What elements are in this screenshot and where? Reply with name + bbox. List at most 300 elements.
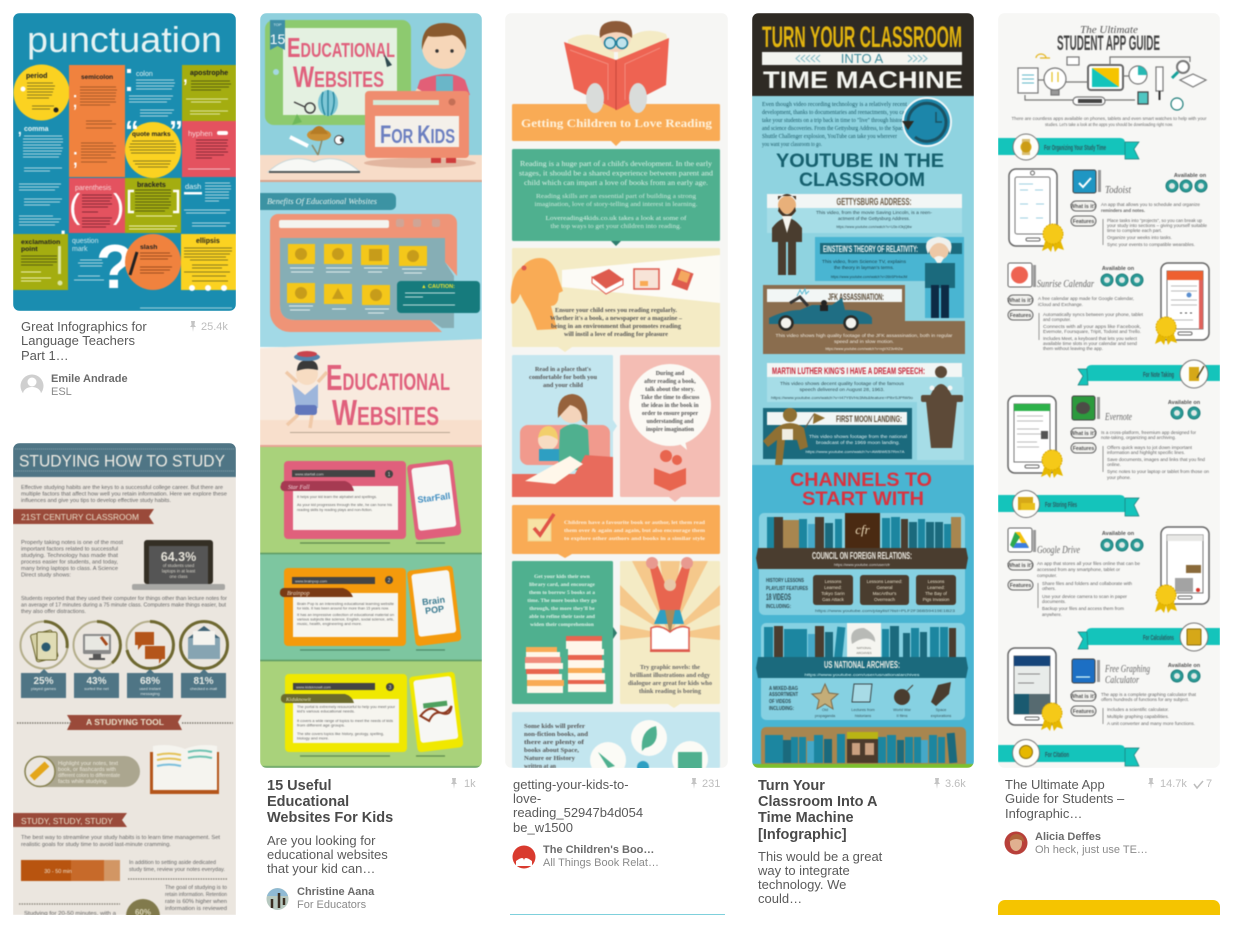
figure: astronaut <box>763 408 825 467</box>
entry: JFK Assassination <box>763 285 965 354</box>
panel: favourite author: them over & again and again, but also encourage them <box>564 528 705 534</box>
tile: slash: slash <box>140 244 157 251</box>
entry: JFK Assassination: https://www.youtube.com/watch?v=ngVXZ3v4h2w <box>825 347 903 351</box>
image: National Archives: NATIONAL <box>857 646 872 650</box>
app: Free Graphing Calculator: Calculator <box>1105 675 1139 686</box>
pin: studying how to study: study time, review your notes everyday. <box>129 867 225 873</box>
title: The Ultimate <box>1080 24 1138 36</box>
app: Sunrise Calendar: them without leaving the app. <box>1043 346 1103 351</box>
app: Evernote: your phone. <box>1107 475 1131 480</box>
panel: non-fiction: non-fiction books, and <box>524 732 589 738</box>
laptop stat: of students used <box>163 563 195 568</box>
banner: benefits <box>260 193 396 210</box>
illustration: superhero on book <box>646 557 693 651</box>
panel: library card: library card, and encourage <box>529 582 595 588</box>
laptop stat: one class <box>169 574 188 579</box>
next pin: yellow top edge <box>998 900 1220 915</box>
shelf: US National Archives: World War <box>893 708 912 712</box>
card: Brainpop: various subjects like science, English, social science, arts, <box>297 618 394 622</box>
pin: studying how to study: The goal of studying is to <box>165 885 227 891</box>
caption: punctuation pin: Great Infographics for <box>21 319 147 334</box>
caption: app guide pin: Oh heck, just use TE… <box>1035 844 1148 856</box>
phone: Evernote <box>1008 396 1063 478</box>
tile: quote marks <box>125 115 183 178</box>
caption: app guide pin: Guide for Students – <box>1005 791 1125 806</box>
entry: Martin Luther King: This video shows decent quality footage of the famous <box>780 381 904 386</box>
heading: youtube in the classroom: CLASSROOM <box>799 170 925 191</box>
panel: introduction: Reading skills are an essential part of building a strong <box>536 193 696 200</box>
panel: non-fiction: written at an <box>524 764 557 770</box>
tile: hyphen <box>182 121 236 177</box>
heading: channels to start with: START WITH <box>802 489 924 510</box>
app: Google Drive: computer. <box>1037 573 1057 578</box>
entry: Martin Luther King: MARTIN LUTHER KING'S I HAVE A DREAM SPEECH: <box>772 366 925 377</box>
tile: ellipsis <box>181 234 236 291</box>
tile: parenthesis: ) <box>113 188 124 226</box>
app: Google Drive: Google Drive <box>1037 545 1080 556</box>
ribbon: a studying tool <box>17 715 233 730</box>
intro text: There are countless apps available on phones, tablets and even smart watches to help with your <box>1012 116 1207 121</box>
caption: time machine pin: Time Machine <box>758 810 854 826</box>
caption: punctuation pin: ESL <box>51 386 72 398</box>
panel: comfortable place: comfortable for both you <box>529 375 598 381</box>
panel: graphic novels: Try graphic novels: the <box>640 665 700 671</box>
phone: Todoist <box>1009 169 1064 252</box>
panel: introduction: Reading is a huge part of a child's development. In the early <box>520 160 713 168</box>
panel: talk about the story: understanding and <box>647 419 694 425</box>
card: Kids: kid's various educational needs. <box>297 710 355 714</box>
ribbon: study study study <box>13 813 127 827</box>
shelf: US National Archives <box>756 623 968 720</box>
entry: Gettysburg Address: GETTYSBURG ADDRESS: <box>836 197 912 208</box>
app: Google Drive: anywhere. <box>1042 612 1062 617</box>
panel: talk about the story: During and <box>656 371 685 377</box>
app: Sunrise Calendar: Available on <box>1102 266 1135 272</box>
panel: see you reading: Ensure your child sees you reading regularly. <box>555 308 678 314</box>
pin: studying how to study: In addition to setting aside dedicated <box>129 860 216 866</box>
app: Sunrise Calendar: Sunrise Calendar <box>1037 279 1094 290</box>
stat: 43% surfed the net: surfed the net <box>84 686 110 691</box>
banner: for citation: For Citation <box>1045 752 1069 759</box>
entry: Einstein's Theory of Relativity: https://www.youtube.com/watch?v=26bSPIr4wJM <box>831 275 907 279</box>
caption: time machine pin <box>757 778 966 906</box>
header: TURN YOUR CLASSROOM <box>762 21 962 54</box>
caption: educational websites pin: For Educators <box>297 899 367 911</box>
card: Brainpop: for kids. It has been around for more than 15 years now. <box>297 606 389 610</box>
illustration: running kid <box>286 351 327 428</box>
app: Sunrise Calendar: Evernote, Foursquare, TripIt, Todoist and Trello. <box>1043 329 1141 334</box>
browser: for kids <box>365 91 469 158</box>
illustration: open book, balloon, hat <box>268 90 360 173</box>
shelf: Council on Foreign Relations <box>756 513 968 615</box>
stat: 81% checked e-mail: 81% <box>193 676 214 687</box>
entry: Gettysburg Address: actment of the Gettysburg Address. <box>838 216 910 221</box>
app: Sunrise Calendar: Connects with all your apps like Facebook, <box>1043 324 1141 329</box>
pin: studying how to study: Properly taking notes is one of the most <box>21 540 123 546</box>
shelf: Council on Foreign Relations: Tokyo Sarin <box>821 591 845 596</box>
entry: Martin Luther King <box>767 363 964 460</box>
icon: clock <box>902 98 951 146</box>
banner: for organizing your study time: For Organizing Your Study Time <box>1044 145 1106 152</box>
panel: library card: widen their comprehension <box>530 622 594 628</box>
shelf: US National Archives: https://www.youtube.com/user/usnationalarchives <box>804 673 920 677</box>
app: Google Drive: Share files and folders and collaborate with <box>1042 581 1133 586</box>
ribbon: a studying tool: A STUDYING TOOL <box>86 717 164 727</box>
stat: 81% checked e-mail <box>180 622 228 698</box>
caption: punctuation pin: Language Teachers <box>21 333 135 348</box>
panel: introduction: the top ways to get your children into reading. <box>550 224 682 230</box>
panel: library card: able to refine their taste and <box>529 614 595 620</box>
panel: introduction <box>512 149 720 246</box>
caption: punctuation pin: 25.4k <box>201 321 228 333</box>
pin: studying how to study: realistic goals for study time to avoid last-minute cramming. <box>21 842 171 848</box>
tile: quote marks: ” <box>169 115 183 146</box>
app: Todoist: time to complete each part. <box>1107 228 1162 233</box>
shelf: US National Archives: Old <box>822 708 828 712</box>
shelf: Council on Foreign Relations: Lessons Learned: <box>867 579 902 584</box>
app: Sunrise Calendar: available time slots in your calendar and send <box>1043 341 1138 346</box>
app: Free Graphing Calculator: offers hundreds of functions for any subject. <box>1101 697 1189 702</box>
panel: library card: through, the more they'll be <box>529 606 595 612</box>
image: National Archives <box>847 623 881 657</box>
shelf: Council on Foreign Relations: https://www.youtube.com/playlist?list=PLF2F36B59419E1B23 <box>815 609 955 613</box>
title <box>1057 24 1160 55</box>
panel: see you reading: will instil a love of reading for pleasure <box>564 332 668 338</box>
entry: Einstein's Theory of Relativity: This video, from Science TV, explains <box>822 259 906 264</box>
panel: library card: them to borrow 5 books at a <box>529 590 595 596</box>
entry: Gettysburg Address <box>767 194 962 275</box>
tile: colon: colon <box>136 71 153 78</box>
caption: educational websites pin: 15 Useful <box>267 778 331 794</box>
app: Todoist: Todoist <box>1105 185 1131 196</box>
illustration: car <box>769 289 872 330</box>
tile: slash <box>125 234 181 290</box>
app: Sunrise Calendar: Automatically syncs between your phone, tablet <box>1043 312 1144 317</box>
banner: for storing files: For Storing Files <box>1045 502 1077 509</box>
pin: studying how to study: process easier for students, and today, <box>21 560 118 566</box>
heading: channels to start with <box>790 470 932 510</box>
app: Free Graphing Calculator: Includes a scientific calculator. <box>1107 707 1169 712</box>
pin: studying how to study: retain information. Retention <box>165 892 227 898</box>
app: Google Drive: Available on <box>1102 531 1135 537</box>
banner: for calculations <box>1078 623 1220 651</box>
ribbon: study study study: STUDY, STUDY, STUDY <box>21 816 113 826</box>
heading: educational websites <box>290 357 450 433</box>
caption: educational websites pin: Websites For Kids <box>267 810 393 826</box>
stat: 25% played games: played games <box>31 686 56 691</box>
icons: star, scroll, bomb, rocket <box>812 682 951 709</box>
shelf: Council on Foreign Relations: HISTORY LESSONS <box>766 578 804 584</box>
header: INTO A <box>841 51 884 66</box>
app: Todoist: reminders and notes. <box>1101 208 1145 213</box>
tip pill: highlight: different colors to differentiate <box>58 773 120 779</box>
tablet with title: TOP <box>273 22 282 27</box>
tile: semicolon: ; <box>72 87 78 112</box>
panel: favourite author <box>512 505 720 558</box>
tile: dash: dash <box>185 182 201 191</box>
app: Todoist: What is it? <box>1070 204 1097 210</box>
entry: Einstein's Theory of Relativity <box>815 237 964 318</box>
entry: JFK Assassination: speed and in slow motion. <box>834 339 894 344</box>
tile: period: period <box>26 73 47 80</box>
app: Todoist: Sync your events to compatible wearables. <box>1107 242 1195 247</box>
card: Star Fall: 1 <box>388 472 391 478</box>
app: Evernote: What is it? <box>1070 431 1097 437</box>
tablet: StarFall: StarFall <box>417 491 451 505</box>
shelf: Council on Foreign Relations: cfr <box>855 522 871 537</box>
tile: semicolon: ; <box>72 144 79 171</box>
illustration: mother and child <box>512 394 613 497</box>
panel: see you reading: being in an environment that promotes reading <box>551 324 681 330</box>
phone: Google Drive <box>1155 527 1209 613</box>
panel: talk about the story: order to ensure proper <box>642 411 699 417</box>
caption: time machine pin: could… <box>758 891 802 906</box>
app: Todoist: your study into sections – giving yourself suitable <box>1107 223 1208 228</box>
heading: channels to start with: CHANNELS TO <box>790 470 932 491</box>
caption: reading pin: reading_52947b4d054 <box>513 805 643 820</box>
heading: educational websites: WEBSITES <box>332 392 439 433</box>
app: Google Drive: What is it? <box>1007 563 1034 569</box>
app: Todoist <box>1070 170 1208 247</box>
header <box>752 13 974 96</box>
browser: for kids: FOR KIDS <box>380 121 455 149</box>
caption: app guide pin: Infographic… <box>1005 806 1082 821</box>
app: Evernote: information and highlight specific lines. <box>1107 450 1185 455</box>
icons: book, newspaper, magazine <box>592 268 694 294</box>
stat: 25% played games: 25% <box>33 676 54 687</box>
caption: time machine pin: [Infographic] <box>758 827 847 843</box>
illustration: boy <box>414 23 470 163</box>
tile: apostrophe: apostrophe <box>190 70 228 77</box>
pin: studying how to study: important factors related to successful <box>21 546 118 552</box>
tile: exclamation point: exclamation <box>21 239 60 246</box>
app: Sunrise Calendar: Features <box>1010 313 1031 319</box>
app: Todoist: Place tasks into "projects", so you can break up <box>1107 218 1203 223</box>
pin: studying how to study <box>13 443 236 933</box>
stat circle: 60%: 60% <box>135 908 151 917</box>
caption: reading pin: love- <box>513 791 541 806</box>
entry: Gettysburg Address: https://www.youtube.com/watch?v=U3e-lOkjQ8w <box>836 225 912 229</box>
shelf: Council on Foreign Relations: Lessons <box>825 579 842 584</box>
banner: for note taking: For Note Taking <box>1143 372 1174 379</box>
panel: comfortable place: Read in a place that's <box>535 367 592 373</box>
panel: non-fiction: Nature or History <box>524 756 575 762</box>
panel: library card: Get your kids their own <box>534 574 590 580</box>
shelf: US National Archives: II films <box>897 714 908 718</box>
card: Star Fall: As your kid progresses through the site, he can hone his <box>297 503 392 507</box>
entry: Martin Luther King: speech delivered on August 28, 1963. <box>800 387 884 392</box>
shelf: US National Archives: INCLUDING: <box>769 706 794 712</box>
laptop stat <box>132 540 225 590</box>
app: Google Drive: accessed from any smartphone, tablet or <box>1037 567 1121 572</box>
shelf: US National Archives: Space <box>936 708 946 712</box>
caption: reading pin: The Children's Boo… <box>543 844 654 856</box>
app: Sunrise Calendar: Includes Meet, a keyboard that lets you select <box>1043 336 1138 341</box>
bar: study time <box>21 860 120 881</box>
tile: hyphen: hyphen <box>188 129 213 138</box>
pin: studying how to study: studying. Technology has made that <box>21 553 119 559</box>
caption: educational websites pin <box>266 778 476 911</box>
app: Google Drive: documents. <box>1042 599 1066 604</box>
tile: apostrophe <box>182 61 236 121</box>
avatar: Christine Aana <box>266 888 288 910</box>
poster title: punctuation <box>27 19 222 60</box>
app: Evernote <box>1070 396 1210 480</box>
app: Free Graphing Calculator: The app is a complete graphing calculator that <box>1101 692 1197 697</box>
panel: talk about the story: the ideas in the book in <box>641 403 699 409</box>
card: Brainpop: www.brainpop.com <box>295 580 327 584</box>
pin: ultimate student app guide <box>998 13 1220 768</box>
tablet: Brain Pop <box>407 565 462 646</box>
shelf: Council on Foreign Relations: INCLUDING: <box>766 604 791 610</box>
card: Brainpop: music, health, engineering and more. <box>297 622 362 626</box>
app: Free Graphing Calculator: Free Graphing <box>1104 664 1150 675</box>
intro paragraph: and science discoveries. From the Gettysburg Address, to the Space <box>762 126 905 132</box>
tablet: map <box>409 671 464 753</box>
tile: quote marks: “ <box>125 115 139 146</box>
panel: library card: time. The more books they go <box>527 598 597 604</box>
card: Kids: www.kidsknowit.com <box>296 686 331 690</box>
panel: see you reading: Whether it's a book, a newspaper or a magazine – <box>550 316 682 322</box>
intro paragraph: development, thanks to documentaries and reenactments, you can <box>762 110 907 116</box>
shelf: Council on Foreign Relations: Overreach <box>874 597 895 602</box>
tile: comma: , <box>60 214 66 239</box>
panel: library card <box>512 561 617 704</box>
caption: educational websites pin: Are you looking for <box>267 833 376 848</box>
shelf: Council on Foreign Relations: General <box>876 585 893 590</box>
app: Free Graphing Calculator: Multiple graphing capabilities. <box>1107 714 1169 719</box>
panel: graphic novels: dialogue are great for kids who <box>628 681 712 687</box>
tile: brackets: brackets <box>137 182 166 189</box>
tile: semicolon: semicolon <box>81 74 113 81</box>
tip pill: highlight: facts while studying. <box>58 779 108 785</box>
card: Kids: The site covers topics like history, geology, spelling, <box>297 732 384 736</box>
app: Sunrise Calendar: A free calendar app made for Google Calendar, <box>1038 296 1134 301</box>
banner: for citation <box>998 740 1139 766</box>
pin: studying how to study: The best way to streamline your study habits is to learn time management. Set <box>21 835 220 841</box>
app: Evernote: Available on <box>1168 400 1201 406</box>
tile: parenthesis <box>69 178 125 233</box>
app: Google Drive: Features <box>1010 583 1031 589</box>
app: Evernote: Offers quick ways to jot down important <box>1107 445 1193 450</box>
entry: Gettysburg Address: This video, from the movie Saving Lincoln, is a reen- <box>816 210 933 215</box>
intro paragraph: Even though video recording technology is a relatively recent <box>762 102 907 108</box>
panel: talk about the story: after reading a book, <box>644 379 696 385</box>
banner: for organizing your study time <box>998 134 1139 160</box>
laptop stat: 64.3% <box>161 550 196 564</box>
app: Todoist: Available on <box>1174 173 1207 179</box>
tile: period <box>14 64 70 120</box>
intro text: studies. Let's take a look at the apps you should be downloading right now. <box>1045 122 1173 127</box>
tablet with title: WEBSITES <box>293 61 384 94</box>
bar: study time: 30 - 50 min <box>44 869 72 875</box>
tile: colon <box>127 69 175 116</box>
banner: for storing files <box>998 490 1139 518</box>
banner: title <box>512 104 720 146</box>
tablet with title: 15 <box>270 31 285 47</box>
app: Google Drive: others. <box>1042 586 1056 591</box>
tablet: StarFall <box>407 459 462 540</box>
stat: 68% used instant messaging: used instant <box>139 686 162 691</box>
stat circle: 60% <box>125 898 161 915</box>
app: Sunrise Calendar: iCloud and Exchange. <box>1038 302 1083 307</box>
pin: studying how to study: Effective studying habits are the keys to a successful college career. But there are <box>21 485 223 491</box>
stat: 68% used instant messaging <box>126 622 174 698</box>
caption: app guide pin <box>1004 777 1212 856</box>
tile: parenthesis: parenthesis <box>75 185 112 192</box>
pin: studying how to study: Students reported that they used their computer for things other than lecture notes for <box>21 596 227 602</box>
app: Evernote: Save documents, images and links that you find <box>1107 457 1206 462</box>
entry: JFK Assassination: This video shows high quality footage of the JFK assassination, both in regular <box>776 333 953 338</box>
pin: classroom time machine <box>752 13 974 768</box>
tile: question mark: question <box>72 238 99 245</box>
entry: First Moon Landing: This video shows footage from the national <box>809 434 907 439</box>
figure: speaker at podium <box>917 366 964 460</box>
card: Star Fall: Star Fall <box>288 485 310 491</box>
panel: see you reading <box>511 248 720 352</box>
shelf: Council on Foreign Relations: Learned: <box>927 585 945 590</box>
intro paragraph: you want your classroom to go. <box>762 142 822 148</box>
pin: studying how to study: an average of 17 minutes during a 75 minute class. Computers make things easier, but <box>21 602 226 608</box>
header band: STUDYING HOW TO STUDY <box>19 452 225 470</box>
illustration: child reading red book <box>564 21 669 113</box>
tile: parenthesis: ( <box>69 188 81 226</box>
tablet with title <box>265 20 411 125</box>
shelf: US National Archives: explorations <box>931 714 951 718</box>
stat: 43% surfed the net <box>74 622 120 698</box>
panel: graphic novels: think reading is boring <box>639 689 701 695</box>
tile: comma: comma <box>24 126 49 133</box>
app: Free Graphing Calculator: Available on <box>1168 663 1201 669</box>
card: Brainpop: Brainpop <box>287 591 310 597</box>
caption: app guide pin: 7 <box>1206 778 1212 790</box>
pin: studying how to study: rate is 60% higher when <box>165 899 227 905</box>
intro paragraph <box>762 102 907 148</box>
caption: time machine pin: Classroom Into A <box>758 794 878 810</box>
app: Evernote: Evernote <box>1104 412 1132 423</box>
card: Kids: 3 <box>389 685 392 691</box>
panel: graphic novels: brilliant illustrations and edgy <box>630 673 710 679</box>
shelf: bottom books <box>752 727 974 768</box>
panel: graphic novels <box>620 557 720 708</box>
shelf: US National Archives: ASSORTMENT <box>769 692 799 698</box>
caption: app guide pin: The Ultimate App <box>1005 777 1105 792</box>
shelf: Council on Foreign Relations: MacArthur's <box>873 591 897 596</box>
pin: studying how to study: many bring laptops to class. A Science <box>21 566 118 572</box>
shelf: US National Archives: Lectures from <box>851 708 875 712</box>
panel: non-fiction <box>512 712 720 778</box>
icon: open book <box>150 745 219 794</box>
card: Kids: The portal is extremely resourceful to help you meet your <box>297 705 396 709</box>
card: Star Fall: reading skills by reading plays and non-fiction. <box>297 508 372 512</box>
pin: studying how to study: they also offer distractions. <box>21 609 86 615</box>
tile: quote marks: quote marks <box>132 131 171 138</box>
card: Brainpop: It has an impressive collection of educational material on <box>297 613 394 617</box>
heading: educational websites: EDUCATIONAL <box>326 357 450 398</box>
app: Google Drive: Use your device camera to scan in paper <box>1042 594 1128 599</box>
pin: getting children to love reading <box>505 13 728 778</box>
stat: 43% surfed the net: 43% <box>86 676 107 687</box>
caption: time machine pin: way to integrate <box>757 863 850 878</box>
app: Free Graphing Calculator: Features <box>1073 709 1094 715</box>
figure: Lincoln <box>772 194 802 275</box>
tablet: Brain Pop: Brain <box>421 595 446 607</box>
caption: educational websites pin: 1k <box>464 778 476 790</box>
tile: comma <box>18 126 66 235</box>
avatar: Emile Andrade <box>20 374 44 398</box>
app: Evernote: Sync notes to your laptop or tablet from those on <box>1107 469 1210 474</box>
heading: youtube in the classroom <box>776 151 944 191</box>
